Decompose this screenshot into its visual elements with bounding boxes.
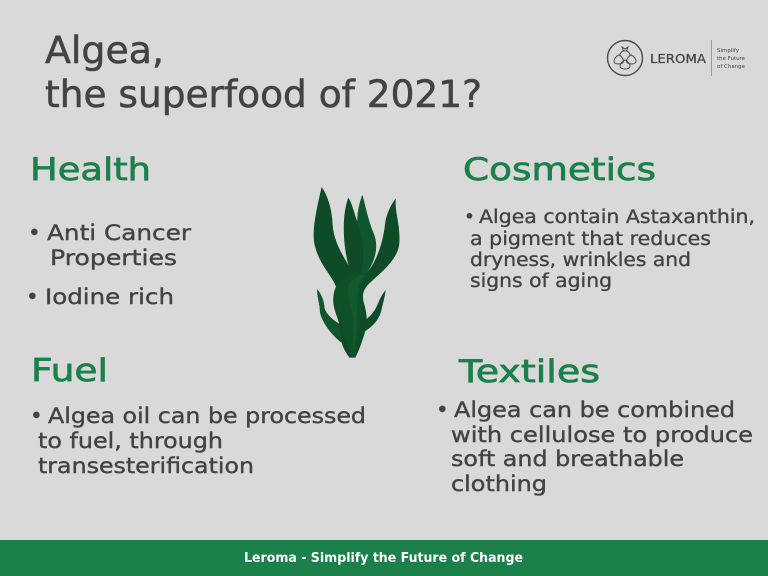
logo tagline: of Change [717,64,746,70]
text: textiles bullets: with cellulose to produce [451,423,753,448]
text: cosmetics bullets [464,207,755,292]
seaweed stem highlight [335,272,367,357]
seaweed silhouette [314,187,400,358]
footer text: Leroma - Simplify the Future of Change [244,550,523,566]
icon: logo circle with bags [608,40,642,76]
text: health bullets: • [26,285,39,310]
text: cosmetics bullets: • [464,207,475,228]
text: cosmetics bullets: a pigment that reduces [470,229,711,250]
icon: seaweed [314,187,400,358]
footer bar [0,540,768,576]
heading: fuel: Fuel [31,353,108,389]
title: Algea, [45,29,164,72]
logo tagline [717,48,746,70]
text: textiles bullets: • [436,398,449,423]
heading: textiles: Textiles [458,354,600,390]
text: fuel bullets: to fuel, through [38,429,223,454]
panel: fuel [30,353,366,479]
text: cosmetics bullets: Algea contain Astaxanthin, [479,207,755,228]
seaweed lower frond shading [317,289,342,343]
text: fuel bullets: Algea oil can be processed [48,404,366,429]
logo tagline: the Future [717,56,746,62]
text: fuel bullets [30,404,366,479]
text: health bullets: • [28,221,41,246]
panel: cosmetics [463,152,755,292]
text: health bullets: Properties [50,246,177,271]
text: textiles bullets: Algea can be combined [454,398,735,423]
logo tagline: Simplify [717,48,740,54]
panel: textiles [436,354,753,497]
text: health bullets: Anti Cancer [47,221,191,246]
title [45,29,482,116]
text: textiles bullets: soft and breathable [451,447,684,472]
heading: cosmetics: Cosmetics [463,152,656,188]
text: health bullets: Iodine rich [45,285,174,310]
text: fuel bullets: transesterification [38,454,254,479]
logo wordmark: LEROMA [650,51,706,66]
panel: health [26,152,191,310]
title: the superfood of 2021? [45,73,482,116]
text: cosmetics bullets: dryness, wrinkles and [470,250,691,271]
seaweed inner blade highlight [357,195,376,277]
text: fuel bullets: • [30,404,43,429]
text: health bullets [26,221,191,310]
logo: Leroma [608,40,746,76]
heading: health: Health [30,152,151,188]
text: cosmetics bullets: signs of aging [470,271,612,292]
text: textiles bullets: clothing [451,472,547,497]
text: textiles bullets [436,398,753,497]
